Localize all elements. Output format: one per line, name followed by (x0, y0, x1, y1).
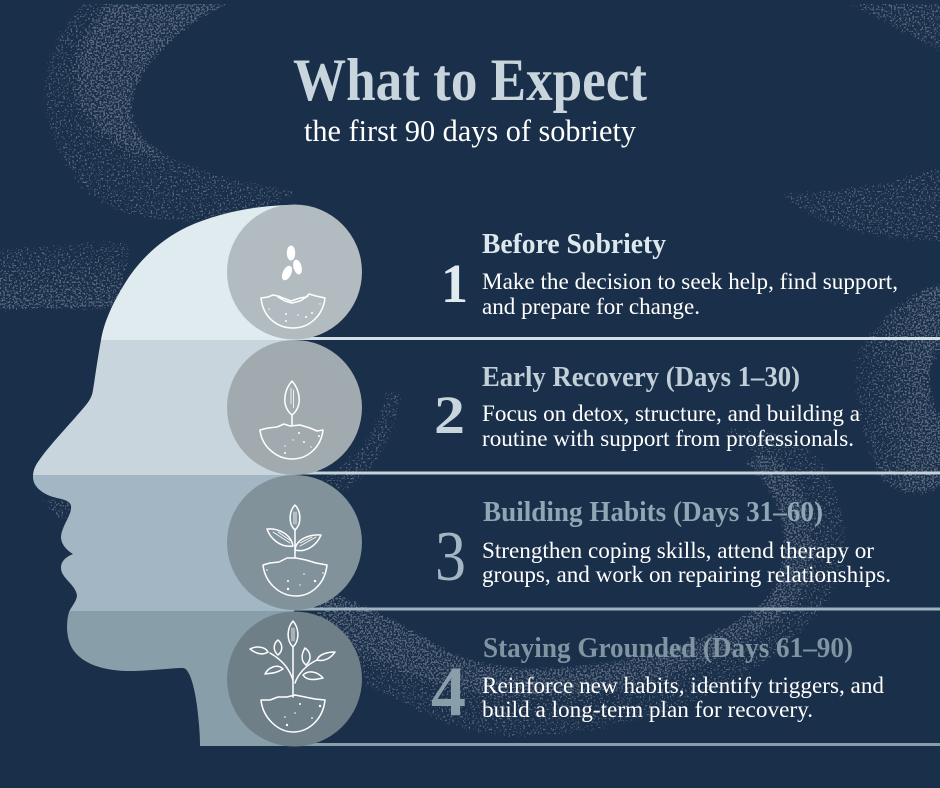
step 3 text: Strengthen coping skills, attend therapy or (482, 538, 874, 563)
step 1 circle (227, 204, 362, 340)
step 3 number: 3 (435, 518, 466, 596)
subtitle: the first 90 days of sobriety (304, 113, 636, 148)
head silhouette (33, 205, 294, 746)
step 3 text (482, 538, 891, 587)
step 1 text (482, 269, 898, 319)
step 3 heading: Building Habits (Days 31–60) (483, 497, 823, 528)
step 1 text: Make the decision to seek help, find support, (482, 269, 898, 294)
title: What to Expect (293, 47, 647, 113)
step 1 heading: Before Sobriety (482, 229, 666, 260)
step 3 circle (227, 475, 362, 610)
step 2 number: 2 (434, 385, 465, 445)
divider lines (290, 337, 940, 746)
step 1 text: and prepare for change. (482, 294, 700, 319)
icon: sprout with one leaf (260, 381, 323, 459)
icon: seeds and soil (261, 246, 325, 328)
step 4 number: 4 (431, 653, 466, 731)
icon: plant with three leaves (263, 505, 327, 596)
step 2 heading: Early Recovery (Days 1–30) (482, 362, 800, 393)
step 3 text: groups, and work on repairing relationships. (482, 562, 891, 587)
step 4 circle (227, 612, 362, 746)
step 4 text (482, 673, 885, 722)
step 1 number: 1 (441, 253, 468, 314)
step 4 text: build a long-term plan for recovery. (482, 697, 813, 722)
step 2 circle (227, 340, 362, 475)
icon: grown plant with many leaves (250, 621, 335, 732)
step 2 text: Focus on detox, structure, and building a (482, 401, 860, 426)
step 4 text: Reinforce new habits, identify triggers, and (482, 673, 885, 698)
step 4 heading: Staying Grounded (Days 61–90) (483, 633, 853, 664)
step 2 text (482, 401, 860, 451)
step 2 text: routine with support from professionals. (482, 426, 854, 451)
